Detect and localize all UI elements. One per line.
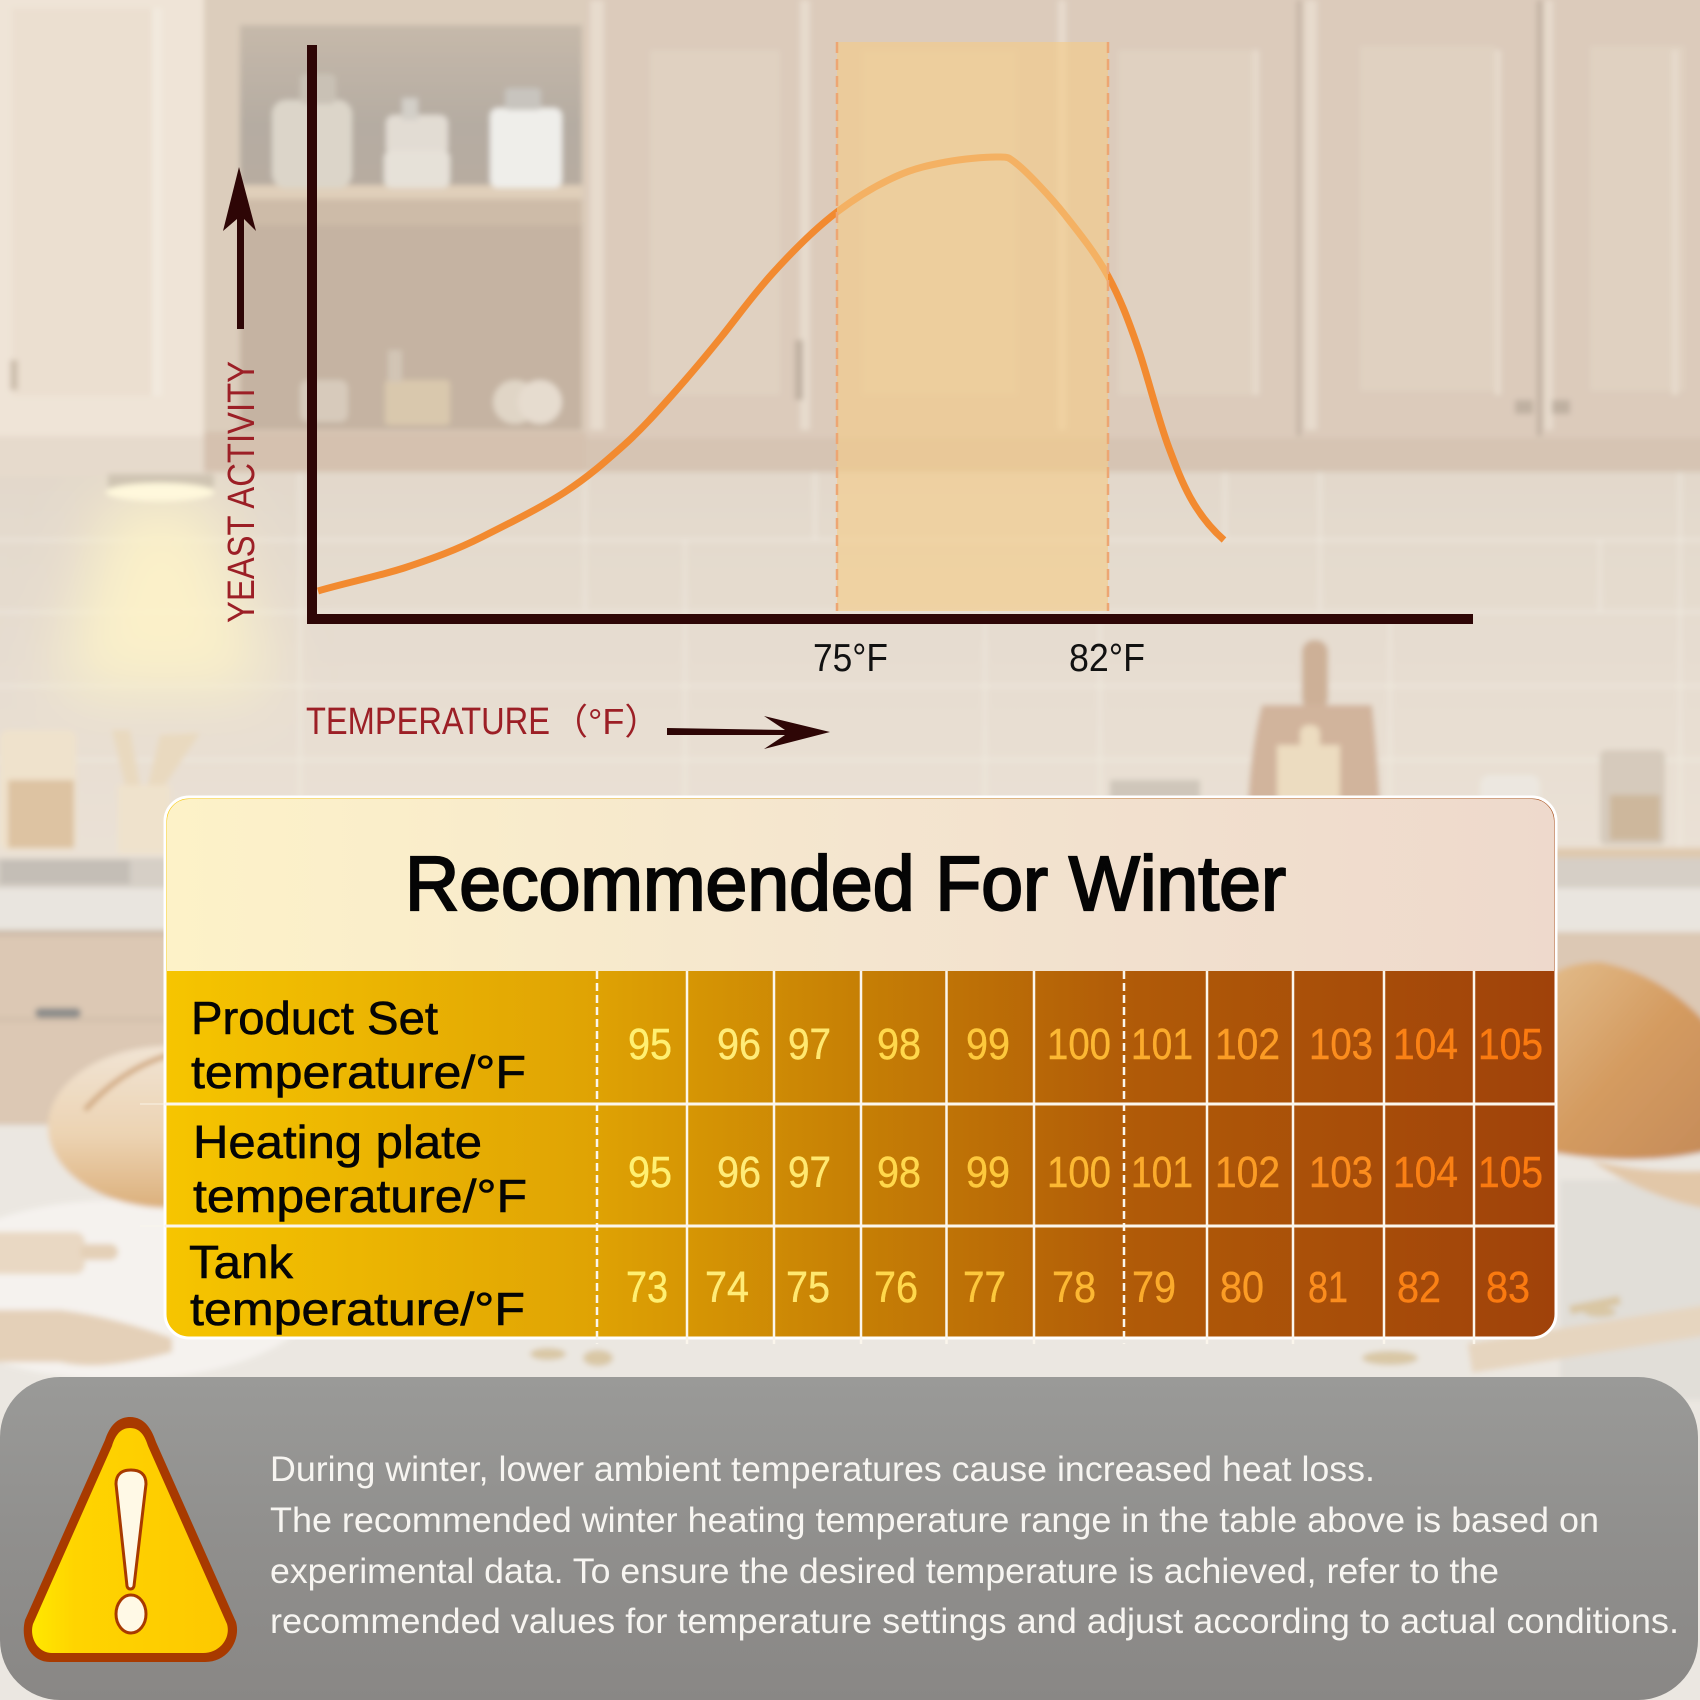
- note text: [270, 1450, 1679, 1641]
- row label: tank temperature: [189, 1236, 525, 1335]
- chart axes: [307, 45, 1473, 624]
- marble table: [0, 1125, 1700, 1700]
- x axis arrow: [667, 716, 830, 749]
- row values: product set: 101: [1131, 1020, 1193, 1069]
- row values: tank: 74: [705, 1263, 749, 1312]
- loaf: right: [1540, 962, 1700, 1210]
- row values: heating plate: 100: [1047, 1148, 1111, 1197]
- table grid lines: [140, 971, 1556, 1344]
- row values: tank: 77: [963, 1263, 1006, 1312]
- row values: product set: 105: [1478, 1020, 1543, 1069]
- cutting boards: [1248, 640, 1380, 810]
- row values: product set: [628, 1020, 1543, 1069]
- left countertop items: [0, 730, 200, 853]
- table: recommended for winter: [140, 797, 1556, 1344]
- row values: heating plate: 98: [877, 1148, 921, 1197]
- row label: tank temperature: temperature/°F: [190, 1283, 525, 1335]
- row label: heating plate temperature: temperature/°F: [193, 1170, 527, 1222]
- row values: product set: 95: [628, 1020, 672, 1069]
- row values: heating plate: 101: [1131, 1148, 1193, 1197]
- row values: product set: 103: [1309, 1020, 1373, 1069]
- note text: experimental data. To ensure the desired temperature is achieved, refer to the: [270, 1552, 1499, 1591]
- line chart: yeast activity vs temperature: [221, 42, 1473, 749]
- row values: product set: 100: [1047, 1020, 1111, 1069]
- row values: heating plate: 104: [1393, 1148, 1458, 1197]
- row values: product set: 98: [877, 1020, 921, 1069]
- rolling pins: [0, 1232, 1700, 1365]
- row values: heating plate: 105: [1478, 1148, 1543, 1197]
- under-cabinet lamp: [106, 474, 214, 501]
- row values: tank: 81: [1308, 1263, 1348, 1312]
- row values: tank: 76: [874, 1263, 918, 1312]
- row values: heating plate: 102: [1215, 1148, 1280, 1197]
- note text: During winter, lower ambient temperatures cause increased heat loss.: [270, 1450, 1375, 1489]
- row values: tank: [626, 1263, 1530, 1312]
- loaf: left: [48, 1046, 292, 1208]
- wheat sprigs: [530, 1307, 1616, 1366]
- shelf bottles: [272, 74, 562, 425]
- note text: The recommended winter heating temperature range in the table above is based on: [270, 1501, 1599, 1540]
- row label: tank temperature: Tank: [189, 1236, 294, 1288]
- row label: product set temperature: Product Set: [191, 992, 438, 1044]
- row values: tank: 83: [1486, 1263, 1530, 1312]
- row label: heating plate temperature: [193, 1116, 527, 1222]
- row values: heating plate: 95: [628, 1148, 672, 1197]
- backsplash tiles: [0, 460, 1700, 890]
- y axis arrow: [223, 167, 256, 329]
- warm lamp glow: [60, 500, 270, 690]
- panel: winter warning note: [0, 1377, 1698, 1700]
- row values: product set: 96: [717, 1020, 761, 1069]
- optimal range band 75 to 82 F: [837, 42, 1108, 611]
- row values: product set: 104: [1393, 1020, 1458, 1069]
- row values: heating plate: [628, 1148, 1543, 1197]
- row values: product set: 99: [966, 1020, 1010, 1069]
- note background: [0, 1377, 1698, 1700]
- icon: warning triangle: [24, 1417, 237, 1662]
- x axis tick label 82 F: 82°F: [1069, 637, 1145, 680]
- activity curve: [318, 157, 1224, 591]
- table panel: [165, 797, 1556, 1338]
- row label: heating plate temperature: Heating plate: [193, 1116, 482, 1168]
- row values: heating plate: 103: [1309, 1148, 1373, 1197]
- row values: product set: 97: [788, 1020, 831, 1069]
- note text: recommended values for temperature settings and adjust according to actual conditions.: [270, 1602, 1679, 1641]
- right countertop items: [1110, 750, 1700, 874]
- row values: tank: 78: [1052, 1263, 1096, 1312]
- under-cabinet rail: [586, 438, 1700, 472]
- x axis tick label 75 F: 75°F: [813, 637, 888, 680]
- row values: tank: 82: [1397, 1263, 1441, 1312]
- row label: product set temperature: [191, 992, 526, 1098]
- row values: tank: 79: [1132, 1263, 1176, 1312]
- left cabinet: [0, 0, 220, 476]
- upper cabinet doors: [586, 0, 1700, 438]
- x axis label: TEMPERATURE: [306, 701, 550, 743]
- counter: [0, 858, 1700, 1132]
- row values: tank: 75: [786, 1263, 830, 1312]
- table title: Recommended For Winter: [405, 841, 1286, 927]
- row values: heating plate: 99: [966, 1148, 1010, 1197]
- x axis label: （°F）: [552, 701, 660, 742]
- row values: tank: 73: [626, 1263, 668, 1312]
- row values: tank: 80: [1220, 1263, 1264, 1312]
- y axis label: YEAST ACTIVITY: [221, 361, 263, 623]
- row values: heating plate: 97: [788, 1148, 831, 1197]
- open shelf unit: [204, 0, 604, 472]
- row label: product set temperature: temperature/°F: [191, 1046, 526, 1098]
- row values: heating plate: 96: [717, 1148, 761, 1197]
- row values: product set: 102: [1215, 1020, 1280, 1069]
